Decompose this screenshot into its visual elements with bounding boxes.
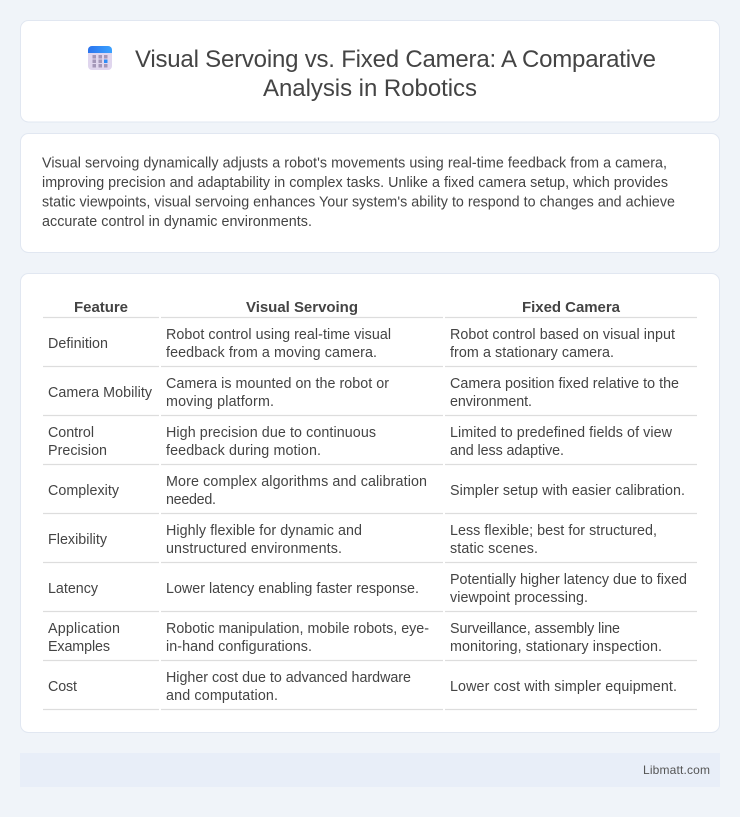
row: Application Examples: Examples: [48, 639, 110, 655]
row: Camera Mobility: moving platform.: [166, 394, 274, 410]
text block: introduction: accurate control in dynamic environments.: [42, 214, 312, 230]
row: Control Precision: Limited to predefined fields of view: [450, 425, 673, 441]
row: Definition: Robot control based on visual input: [450, 327, 675, 343]
row: Camera Mobility: environment.: [450, 394, 532, 410]
row: Flexibility: Flexibility: [48, 532, 108, 548]
row: Control Precision: High precision due to continuous: [166, 425, 376, 441]
icon: calendar: [88, 46, 112, 70]
row: Camera Mobility: Camera position fixed relative to the: [450, 376, 679, 392]
title: Analysis in Robotics: [263, 75, 477, 102]
table header: [43, 299, 697, 318]
row: Control Precision: and less adaptive.: [450, 443, 564, 459]
row: Cost: and computation.: [166, 688, 278, 704]
panel: introduction: [20, 134, 720, 252]
row: Complexity: Complexity: [48, 483, 120, 499]
row: Application Examples: [43, 621, 697, 660]
row: Camera Mobility: Camera is mounted on the robot or: [166, 376, 389, 392]
row: Definition: Definition: [48, 336, 108, 352]
row: Complexity: Simpler setup with easier calibration.: [450, 483, 685, 499]
table header: Fixed Camera: [522, 299, 621, 316]
row: Cost: Cost: [48, 679, 77, 695]
row: Control Precision: feedback during motion.: [166, 443, 321, 459]
row: Latency: Latency: [48, 581, 99, 597]
title: Visual Servoing vs. Fixed Camera: A Comparative: [135, 46, 656, 73]
row: Definition: feedback from a moving camera.: [166, 345, 377, 361]
panel: header: [20, 20, 720, 122]
text block: introduction: [42, 156, 675, 230]
row: Control Precision: Precision: [48, 443, 107, 459]
row: Latency: Lower latency enabling faster response.: [166, 581, 419, 597]
footer: Libmatt.com: [643, 763, 710, 777]
row: Camera Mobility: [43, 376, 697, 416]
row: Control Precision: [43, 425, 697, 464]
row: Definition: Robot control using real-time visual: [166, 327, 391, 343]
table header: Visual Servoing: [246, 299, 358, 316]
row: Flexibility: static scenes.: [450, 541, 538, 557]
row: Control Precision: Control: [48, 425, 94, 441]
row: Application Examples: in-hand configurations.: [166, 639, 312, 655]
row: Complexity: More complex algorithms and calibration: [166, 474, 427, 490]
row: Latency: Potentially higher latency due to fixed: [450, 572, 687, 588]
row: Application Examples: monitoring, stationary inspection.: [450, 639, 662, 655]
row: Cost: Higher cost due to advanced hardware: [166, 670, 411, 686]
row: Application Examples: Surveillance, assembly line: [450, 621, 620, 637]
row: Latency: [43, 572, 697, 612]
row: Flexibility: Highly flexible for dynamic and: [166, 523, 362, 539]
row: Application Examples: Robotic manipulation, mobile robots, eye-: [166, 621, 429, 637]
row: Cost: [43, 670, 697, 710]
text block: introduction: improving precision and adaptability in complex tasks. Unlike a fixed camera setup, which provides: [42, 175, 668, 191]
row: Definition: from a stationary camera.: [450, 345, 614, 361]
row: Latency: viewpoint processing.: [450, 590, 588, 606]
row: Definition: [43, 327, 697, 366]
row: Flexibility: Less flexible; best for structured,: [450, 523, 657, 539]
row: Flexibility: unstructured environments.: [166, 541, 342, 557]
text block: introduction: static viewpoints, visual servoing enhances Your system's ability to respond to changes and achieve: [42, 194, 675, 210]
row: Flexibility: [43, 523, 697, 562]
panel: comparison table: [20, 274, 720, 732]
row: Camera Mobility: Camera Mobility: [48, 385, 153, 401]
table header: Feature: [74, 299, 128, 316]
footer: [20, 753, 720, 787]
row: Complexity: [43, 474, 697, 514]
row: Complexity: needed.: [166, 492, 216, 508]
row: Application Examples: Application: [48, 621, 120, 637]
row: Cost: Lower cost with simpler equipment.: [450, 679, 677, 695]
title: [135, 46, 656, 102]
text block: introduction: Visual servoing dynamically adjusts a robot's movements using real-time feedback from a camera,: [42, 156, 667, 172]
